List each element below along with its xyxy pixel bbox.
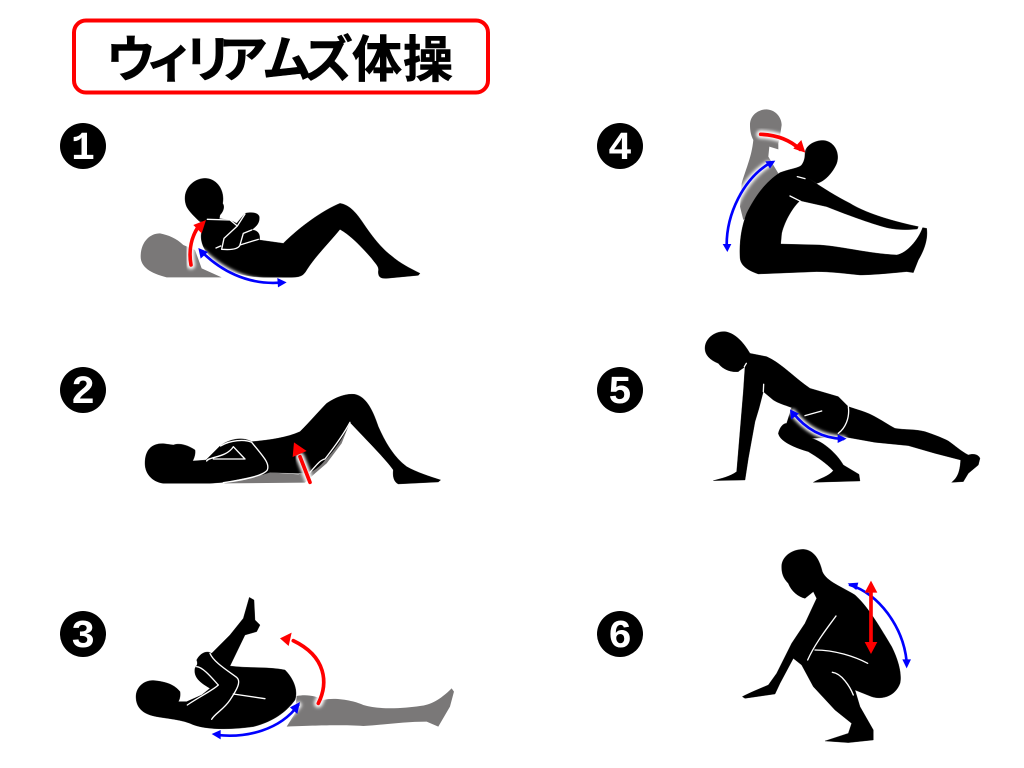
number badge 6 <box>597 611 643 660</box>
figure 1: knee-bent sit-up <box>141 178 420 287</box>
number badge 5: 5 <box>608 371 632 416</box>
arrow: blue lower back stretch <box>212 702 300 739</box>
arrow: blue hip stretch <box>790 409 847 443</box>
arrow: red neck lift <box>190 220 206 265</box>
arrow: blue back stretch <box>198 248 287 287</box>
figure 2: pelvic tilt <box>145 394 441 484</box>
arrow: blue back stretch <box>848 583 911 668</box>
arrow: red pelvis tilt <box>293 442 310 482</box>
number badge 2: 2 <box>71 371 95 416</box>
figure 6: squat <box>742 549 911 743</box>
number badge 2 <box>60 367 106 416</box>
arrow: blue spine stretch <box>723 161 775 252</box>
number badge 1 <box>60 123 106 172</box>
number badge 4: 4 <box>608 127 632 172</box>
number badge 5 <box>597 367 643 416</box>
number badge 3 <box>60 611 106 660</box>
number badge 1: 1 <box>71 127 95 172</box>
figure 5: lunge stretch <box>705 332 980 482</box>
figure 4: seated forward bend <box>723 109 927 275</box>
figure 3: knee to chest <box>136 597 454 739</box>
number badge 3: 3 <box>71 615 95 660</box>
arrow: red head forward <box>761 134 805 153</box>
number badge 4 <box>597 123 643 172</box>
title <box>74 20 488 92</box>
number badge 6: 6 <box>608 615 632 660</box>
arrow: red spine up and down <box>865 581 877 654</box>
title: ウィリアムズ体操 <box>106 32 453 88</box>
arrow: red leg raise <box>280 633 324 703</box>
